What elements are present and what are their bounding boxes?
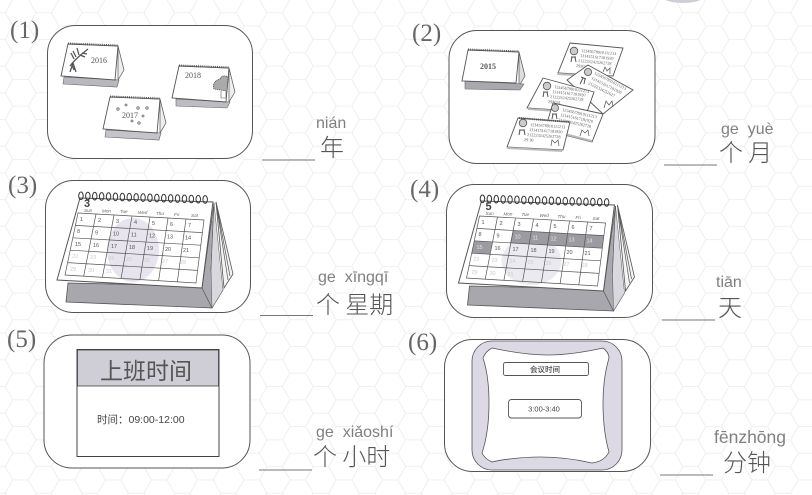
frame 4 bbox=[446, 184, 652, 318]
desk calendar March bbox=[57, 192, 233, 308]
desk calendar March: 19 bbox=[147, 246, 153, 252]
work-hours sign: 时间：09:00-12:00 bbox=[97, 413, 185, 426]
month sheet 8: 293031 bbox=[576, 63, 589, 69]
panel 5: hours bbox=[7, 326, 250, 468]
pinyin ge xingqi: ge xīngqī bbox=[318, 269, 389, 286]
month sheet 9: 2122232425262728 bbox=[527, 132, 561, 139]
desk calendar May: 4 bbox=[536, 223, 539, 229]
desk calendar March: 22 bbox=[72, 254, 78, 260]
frame 1 bbox=[48, 26, 252, 158]
desk calendar May: 19 bbox=[548, 249, 555, 255]
desk calendar March: 1 bbox=[80, 217, 83, 223]
month sheet 8: 12345678910111213 bbox=[581, 48, 617, 56]
month sheet 6: 12345678910111213 bbox=[554, 84, 590, 94]
month sheet 9: 1314151617181920 bbox=[529, 127, 563, 134]
frame 6 bbox=[444, 340, 650, 472]
desk calendar March: 21 bbox=[183, 248, 189, 254]
meeting-time notice: 会议时间 bbox=[530, 364, 560, 375]
calendar 2018 bbox=[172, 66, 235, 108]
hanzi minute: 分钟 bbox=[723, 443, 771, 478]
desk calendar May: Sun bbox=[486, 211, 494, 216]
desk calendar March: 30 bbox=[88, 268, 94, 274]
answer 6: minute bbox=[660, 427, 786, 478]
month sheet 5: 12345678910111213 bbox=[562, 107, 597, 119]
blank line 3 bbox=[260, 314, 313, 316]
frame 3 bbox=[46, 180, 250, 312]
desk calendar May: 27 bbox=[564, 262, 570, 268]
desk calendar May: 18 bbox=[530, 248, 537, 254]
month sheet 8 bbox=[557, 43, 623, 78]
calendar 2017: 2017 bbox=[122, 111, 138, 120]
desk calendar May: 12 bbox=[550, 236, 557, 242]
desk calendar May: 5 bbox=[486, 201, 492, 213]
pinyin ge yue: ge yuè bbox=[721, 121, 774, 138]
desk calendar March: Sun bbox=[84, 208, 93, 213]
desk calendar March: 9 bbox=[95, 230, 98, 236]
calendar 2016: 2016 bbox=[91, 56, 107, 65]
blank line 1 bbox=[262, 159, 315, 161]
number (5): (5) bbox=[7, 326, 36, 353]
blank line 2 bbox=[664, 164, 717, 166]
desk calendar May: 1 bbox=[482, 220, 485, 226]
month sheet 7 bbox=[567, 65, 633, 114]
desk calendar March: 2 bbox=[98, 218, 101, 224]
desk calendar March: 4 bbox=[134, 220, 137, 226]
title box bbox=[504, 362, 588, 376]
desk calendar May: 30 bbox=[490, 271, 496, 277]
desk calendar May: 21 bbox=[584, 251, 591, 257]
answer 1: year bbox=[262, 115, 346, 163]
answer 5: hour bbox=[259, 424, 394, 472]
month sheet 5 bbox=[545, 103, 603, 142]
desk calendar March: 18 bbox=[129, 245, 135, 251]
desk calendar March: 26 bbox=[144, 258, 150, 264]
panel 6: minutes bbox=[408, 329, 650, 472]
desk calendar March: 23 bbox=[90, 255, 96, 261]
number (6): (6) bbox=[408, 329, 437, 356]
desk calendar May: 7 bbox=[590, 226, 593, 232]
desk calendar May: Wed bbox=[540, 213, 549, 218]
desk calendar May: 10 bbox=[514, 234, 521, 240]
desk calendar May: Tue bbox=[522, 212, 530, 217]
desk calendar March: 13 bbox=[167, 234, 173, 240]
desk calendar March: 5 bbox=[152, 221, 155, 227]
desk calendar March: Tue bbox=[120, 209, 128, 214]
month sheet 6 bbox=[527, 78, 594, 114]
desk calendar May: 5 bbox=[554, 224, 557, 230]
work-hours sign: 上班时间 bbox=[100, 352, 192, 386]
desk calendar March: 25 bbox=[126, 257, 132, 263]
calendar 2015 bbox=[462, 50, 525, 90]
desk calendar May: Mon bbox=[504, 212, 513, 216]
desk calendar March: 11 bbox=[131, 232, 137, 238]
desk calendar May: 15 bbox=[476, 245, 483, 251]
desk calendar March: 29 bbox=[70, 267, 76, 273]
highlighted dates bbox=[472, 230, 604, 254]
number (1): (1) bbox=[10, 17, 39, 44]
desk calendar March: 7 bbox=[188, 223, 191, 229]
desk calendar May: 26 bbox=[546, 261, 552, 267]
desk calendar May: 25 bbox=[528, 260, 534, 266]
month sheet 5: 2122232425262728 bbox=[558, 117, 592, 129]
desk calendar March: 31 bbox=[106, 269, 112, 275]
number (4): (4) bbox=[410, 176, 439, 203]
desk calendar May: 9 bbox=[496, 234, 500, 240]
desk calendar May: 8 bbox=[478, 232, 482, 238]
month sheet 8: 1314151617181920 bbox=[580, 53, 614, 61]
desk calendar May: 13 bbox=[568, 238, 575, 244]
answer 3: week bbox=[260, 269, 393, 320]
desk calendar May: 29 bbox=[472, 270, 478, 276]
desk calendar May: 24 bbox=[510, 259, 516, 265]
month sheet 7: 21222324252627 bbox=[588, 80, 616, 98]
desk calendar March: 12 bbox=[149, 234, 155, 240]
panel 4: day bbox=[410, 176, 652, 318]
month sheet 7: 12345678910111213 bbox=[594, 70, 627, 91]
month sheet 5: 1314151617181920 bbox=[560, 112, 594, 124]
blank line 4 bbox=[662, 319, 715, 321]
month sheet 8: 2122232425262728 bbox=[578, 58, 612, 66]
blank line 6 bbox=[660, 474, 713, 476]
desk calendar March: 24 bbox=[108, 256, 114, 262]
desk calendar May: 11 bbox=[532, 236, 538, 242]
desk calendar March: 27 bbox=[162, 259, 168, 265]
month sheet 7: 1314151617181920 bbox=[591, 75, 623, 95]
desk calendar March: 3 bbox=[84, 198, 90, 210]
month sheet 9: 29 30 bbox=[524, 137, 534, 143]
number (2): (2) bbox=[412, 20, 441, 47]
calendar 2016 bbox=[61, 44, 124, 87]
month sheet 6: 2122232425262728 bbox=[550, 94, 584, 102]
panel 3: week bbox=[8, 172, 250, 312]
number (3): (3) bbox=[8, 172, 37, 199]
desk calendar March: Thu bbox=[156, 211, 164, 216]
month sheet 9: 12345678910111213 bbox=[530, 122, 565, 129]
desk calendar May bbox=[458, 195, 634, 311]
desk calendar May: 2 bbox=[500, 221, 503, 227]
hanzi week: 个 星期 bbox=[316, 285, 393, 320]
desk calendar May: 16 bbox=[494, 246, 501, 252]
panel 1: years bbox=[10, 17, 252, 158]
answer 2: month bbox=[664, 121, 774, 168]
calendar 2018: 2018 bbox=[185, 71, 201, 80]
desk calendar May: 3 bbox=[518, 222, 521, 228]
desk calendar March: 28 bbox=[180, 260, 186, 266]
desk calendar May: 6 bbox=[572, 225, 575, 231]
desk calendar May: Fri bbox=[576, 215, 582, 220]
desk calendar May: Thu bbox=[558, 214, 566, 219]
desk calendar March: 15 bbox=[75, 242, 81, 248]
frame 2 bbox=[449, 30, 655, 164]
month sheet 6: 293031 bbox=[548, 99, 561, 105]
pinyin ge xiaoshi: ge xiǎoshí bbox=[316, 424, 394, 441]
desk calendar May: 31 bbox=[508, 272, 514, 278]
answer 4: day bbox=[662, 274, 742, 323]
desk calendar May: 28 bbox=[582, 263, 588, 269]
desk calendar March: 20 bbox=[165, 247, 171, 253]
pinyin fenzhong: fēnzhōng bbox=[714, 427, 786, 447]
meeting-time notice: 3:00-3:40 bbox=[528, 404, 560, 414]
hanzi day: 天 bbox=[718, 288, 742, 323]
desk calendar March: Sat bbox=[191, 213, 199, 218]
desk calendar May: 20 bbox=[566, 250, 573, 256]
hanzi month: 个 月 bbox=[719, 133, 772, 168]
pinyin nian: nián bbox=[316, 115, 346, 132]
frame 5 bbox=[44, 335, 250, 468]
meeting-time notice bbox=[472, 341, 622, 470]
pinyin tian: tiān bbox=[716, 274, 742, 291]
desk calendar March: Fri bbox=[174, 212, 180, 217]
month sheet 9 bbox=[507, 118, 570, 152]
desk calendar March: 16 bbox=[93, 243, 99, 249]
panel 2: months bbox=[412, 20, 655, 164]
hanzi hour: 个 小时 bbox=[313, 437, 390, 472]
calendar 2017 bbox=[103, 96, 166, 140]
desk calendar March: Wed bbox=[138, 210, 148, 215]
desk calendar March: Mon bbox=[102, 208, 111, 214]
desk calendar March: 17 bbox=[111, 244, 117, 250]
blank line 5 bbox=[259, 469, 312, 471]
desk calendar March: 10 bbox=[113, 232, 119, 238]
desk calendar May: 17 bbox=[512, 247, 519, 253]
month sheet 6: 1314151617181920 bbox=[552, 89, 586, 97]
time box bbox=[508, 400, 582, 418]
desk calendar March: 3 bbox=[116, 219, 119, 225]
desk calendar May: Sat bbox=[592, 216, 600, 221]
desk calendar March: 6 bbox=[170, 222, 173, 228]
desk calendar March: 14 bbox=[185, 236, 191, 242]
calendar 2015: 2015 bbox=[480, 62, 496, 71]
desk calendar May: 14 bbox=[586, 238, 593, 244]
desk calendar March: 8 bbox=[77, 229, 80, 235]
desk calendar May: 23 bbox=[492, 258, 498, 264]
hanzi year: 年 bbox=[320, 128, 344, 163]
work-hours sign bbox=[77, 350, 219, 456]
desk calendar May: 22 bbox=[474, 257, 480, 263]
